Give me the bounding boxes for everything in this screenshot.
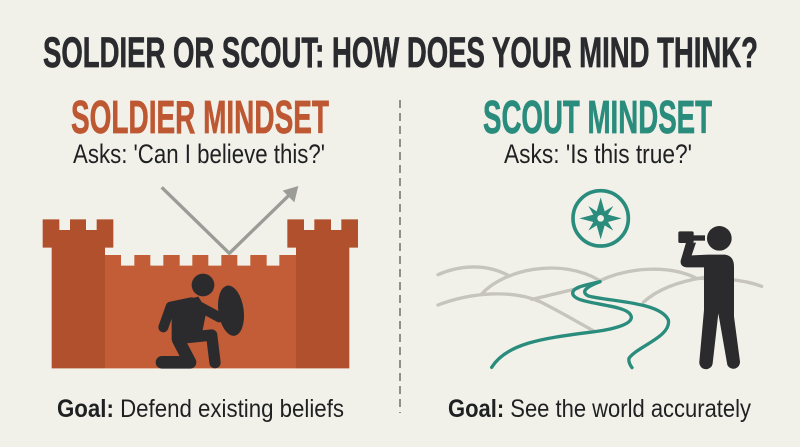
left tower	[43, 219, 113, 368]
soldier figure with shield	[162, 274, 247, 363]
scout figure with binoculars	[678, 226, 740, 369]
illustration: landscape with scout	[438, 191, 762, 369]
scout question: Asks: 'Is this true?'	[504, 139, 692, 169]
right tower	[287, 219, 358, 368]
heading: soldier mindset: SOLDIER MINDSET	[71, 91, 329, 143]
soldier question: Asks: 'Can I believe this?'	[73, 139, 325, 169]
hills	[438, 267, 762, 331]
scout goal: Goal: See the world accurately	[448, 395, 751, 423]
deflected arrow	[162, 186, 298, 253]
illustration: castle with soldier	[43, 186, 358, 368]
castle wall	[105, 255, 296, 368]
river	[492, 282, 669, 368]
compass icon	[573, 191, 628, 246]
soldier goal: Goal: Defend existing beliefs	[57, 395, 344, 423]
